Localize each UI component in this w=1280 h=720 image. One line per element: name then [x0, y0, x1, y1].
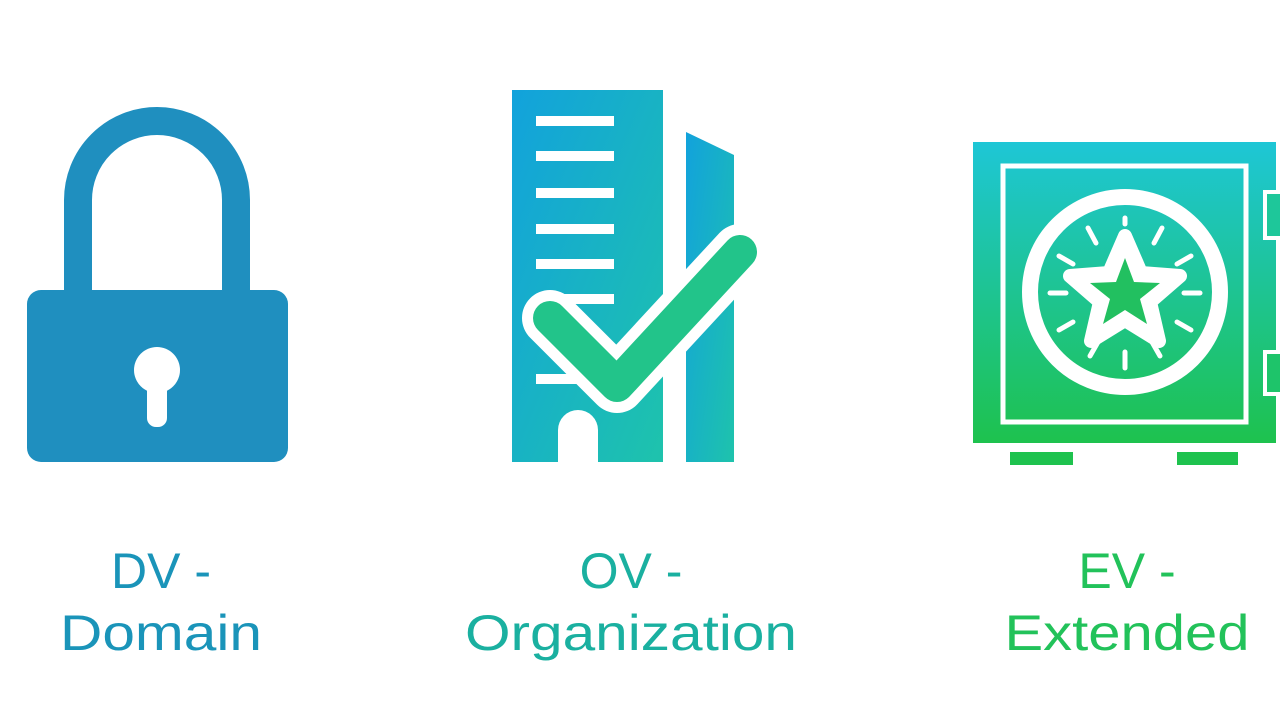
- icon: building with checkmark: [512, 90, 740, 462]
- label: DV - Domain: [60, 543, 262, 661]
- label: OV - Organization: Organization: [465, 605, 797, 661]
- label: EV - Extended: [1004, 543, 1250, 661]
- label: EV - Extended: EV -: [1078, 543, 1176, 599]
- label: EV - Extended: Extended: [1004, 605, 1250, 661]
- label: OV - Organization: OV -: [580, 543, 682, 599]
- label: OV - Organization: [465, 543, 797, 661]
- label: DV - Domain: DV -: [111, 543, 211, 599]
- icon: safe with star: [973, 142, 1280, 465]
- label: DV - Domain: Domain: [60, 605, 262, 661]
- icon: padlock: [27, 121, 288, 462]
